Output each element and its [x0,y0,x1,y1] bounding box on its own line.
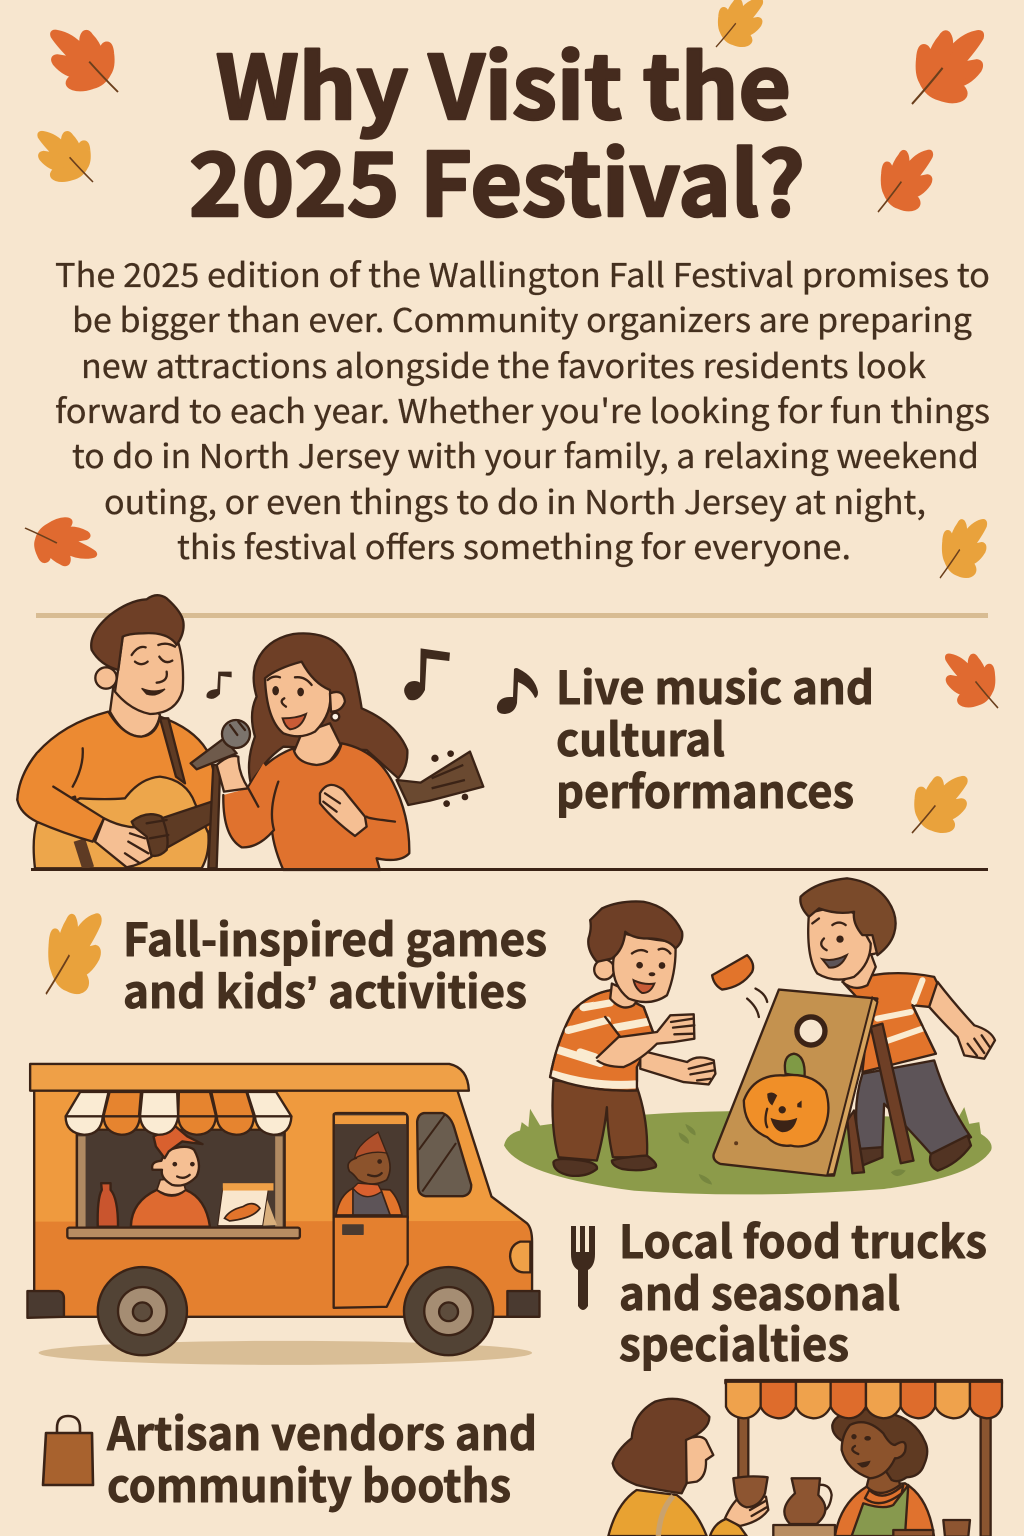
man's neck [110,687,160,737]
leaf: music right red [947,656,998,708]
truck body [28,1090,532,1317]
woman's face details [268,677,312,729]
leaf: paragraph left red [25,511,95,573]
bumpers [27,1291,540,1318]
left kid legs [552,1080,647,1161]
left kid ear [594,960,614,980]
right kid neck [842,954,876,988]
intro paragraph: The 2025 edition of the Wallington Fall Festival promises to [55,249,990,297]
man's ear [95,667,117,689]
mic stand [208,765,220,868]
man's hair [91,595,184,670]
awning [725,1380,1002,1418]
title [189,18,805,242]
leaf: music right yellow [912,779,965,833]
man's hand [95,818,152,867]
left kid neck [610,984,640,1007]
left kid hair [588,901,682,962]
woman's torso [248,743,409,870]
woman's sleeve arm [223,763,395,847]
illustration: food truck [27,1064,540,1365]
shopper hair [613,1399,709,1493]
serving window [77,1130,285,1228]
woman's ear and earring [330,692,345,721]
wheel right [404,1267,493,1355]
cab window [417,1113,471,1196]
board legs [847,1024,913,1173]
intro paragraph: forward to each year. Whether you're looking for fun things [55,385,990,433]
man's arm [17,747,104,842]
heading: live music: performances [556,756,854,821]
illustration: artisan market booth [608,1380,1002,1536]
man's face [115,630,183,714]
motion marks [747,989,767,1017]
left kid sleeve [567,992,625,1059]
woman's face [265,662,330,736]
man's eyes and smile [132,644,175,695]
vendor body [835,1470,934,1536]
roof [30,1064,469,1091]
guitar body [34,777,209,868]
leaf: paragraph right yellow [940,522,985,578]
bean bag [712,955,753,990]
vendor features [851,1434,871,1467]
window posts [78,1136,283,1227]
sound hole and bridge [132,814,168,856]
intro paragraph: to do in North Jersey with your family, a relaxing weekend [72,430,979,478]
intro paragraph: this festival offers something for everyone. [177,521,851,569]
left kid features [632,949,670,993]
wheel left [98,1267,187,1355]
board [713,990,877,1176]
table block [773,1525,835,1536]
heading: food trucks: specialties [619,1309,849,1374]
right kid face [808,908,871,980]
heading: live music: Live music and [556,652,874,717]
heading: live music: cultural [556,704,725,769]
heading: artisan vendors: community booths [107,1450,511,1515]
shopper face [685,1437,713,1483]
headlight [510,1242,530,1272]
heading: live music [556,652,874,821]
vendor hair [832,1409,927,1481]
pumpkin [744,1054,828,1147]
truck outline [34,1090,532,1317]
jug [784,1478,832,1524]
microphone [191,720,250,769]
heading: games: Fall-inspired games [123,904,547,969]
shopper hand [725,1497,768,1526]
right kid legs [856,1060,971,1154]
title: 2025 Festival? [189,115,805,242]
divider: top [36,613,988,618]
grass [504,1107,992,1194]
title: Why Visit the [216,18,791,145]
left kid front arm [595,1014,694,1067]
small note [206,672,232,699]
worker features [172,1162,195,1178]
large note [404,648,450,700]
icon: music note [497,668,538,714]
left kid shirt [550,990,654,1091]
heading: food trucks: and seasonal [619,1258,900,1323]
leaf: right red [878,152,931,212]
leaf: top left red [53,32,118,92]
right kid arm [929,982,995,1059]
man's sweater torso [17,712,217,840]
woman's hand on chest [320,785,367,836]
woman's mic hand [217,756,248,792]
heading: artisan vendors [106,1398,537,1515]
left kid face [613,933,676,1002]
truck upper panel [35,1091,524,1222]
heading: games [123,904,547,1021]
leaf: top center yellow [716,0,761,47]
menu bag [218,1183,277,1226]
booth posts [738,1417,991,1536]
heading: food trucks: Local food trucks [619,1206,987,1271]
guitar headstock [397,750,483,807]
door window [334,1113,408,1218]
left kid back arm [640,1050,715,1084]
woman's hair [249,633,407,787]
shopper bag strap [658,1496,673,1536]
vendor face [842,1422,906,1478]
front pot [893,1530,933,1536]
icon: shopping bag [43,1416,93,1485]
counter [67,1228,300,1238]
heading: food trucks [619,1206,987,1374]
guitar strap lower [79,840,88,868]
cup [733,1476,768,1507]
shopper arm [710,1518,747,1536]
awning [66,1092,291,1135]
driver [336,1132,402,1215]
intro paragraph: be bigger than ever. Community organizers are preparing [72,294,972,342]
illustration: kids playing cornhole [504,878,995,1194]
intro paragraph: outing, or even things to do in North Jersey at night, [104,476,926,524]
worker cap [154,1126,203,1158]
illustration: musicians [17,595,483,870]
right kid ear [862,934,882,954]
intro paragraph [55,249,990,569]
sauce bottle [98,1183,118,1227]
icon: fork [571,1226,595,1310]
right kid shirt [844,973,938,1072]
door [334,1217,408,1308]
leaf: top right orange [912,33,981,104]
right kid features [812,918,847,968]
guitar strap upper [160,718,185,783]
woman's neck [293,723,341,770]
guitar neck [147,800,217,852]
worker body [131,1190,210,1227]
ground line [31,868,988,871]
heading: games: and kids’ activities [123,956,527,1021]
shadow [39,1341,532,1365]
worker face [152,1147,199,1186]
right kid hair [800,878,896,955]
small pot [943,1520,970,1536]
heading: artisan vendors: Artisan vendors and [106,1398,537,1463]
leaf: left yellow [40,133,93,182]
leaf: games yellow [46,917,99,994]
intro paragraph: new attractions alongside the favorites residents look [81,340,926,388]
worker neck [157,1178,186,1195]
shopper sweater [608,1490,707,1536]
